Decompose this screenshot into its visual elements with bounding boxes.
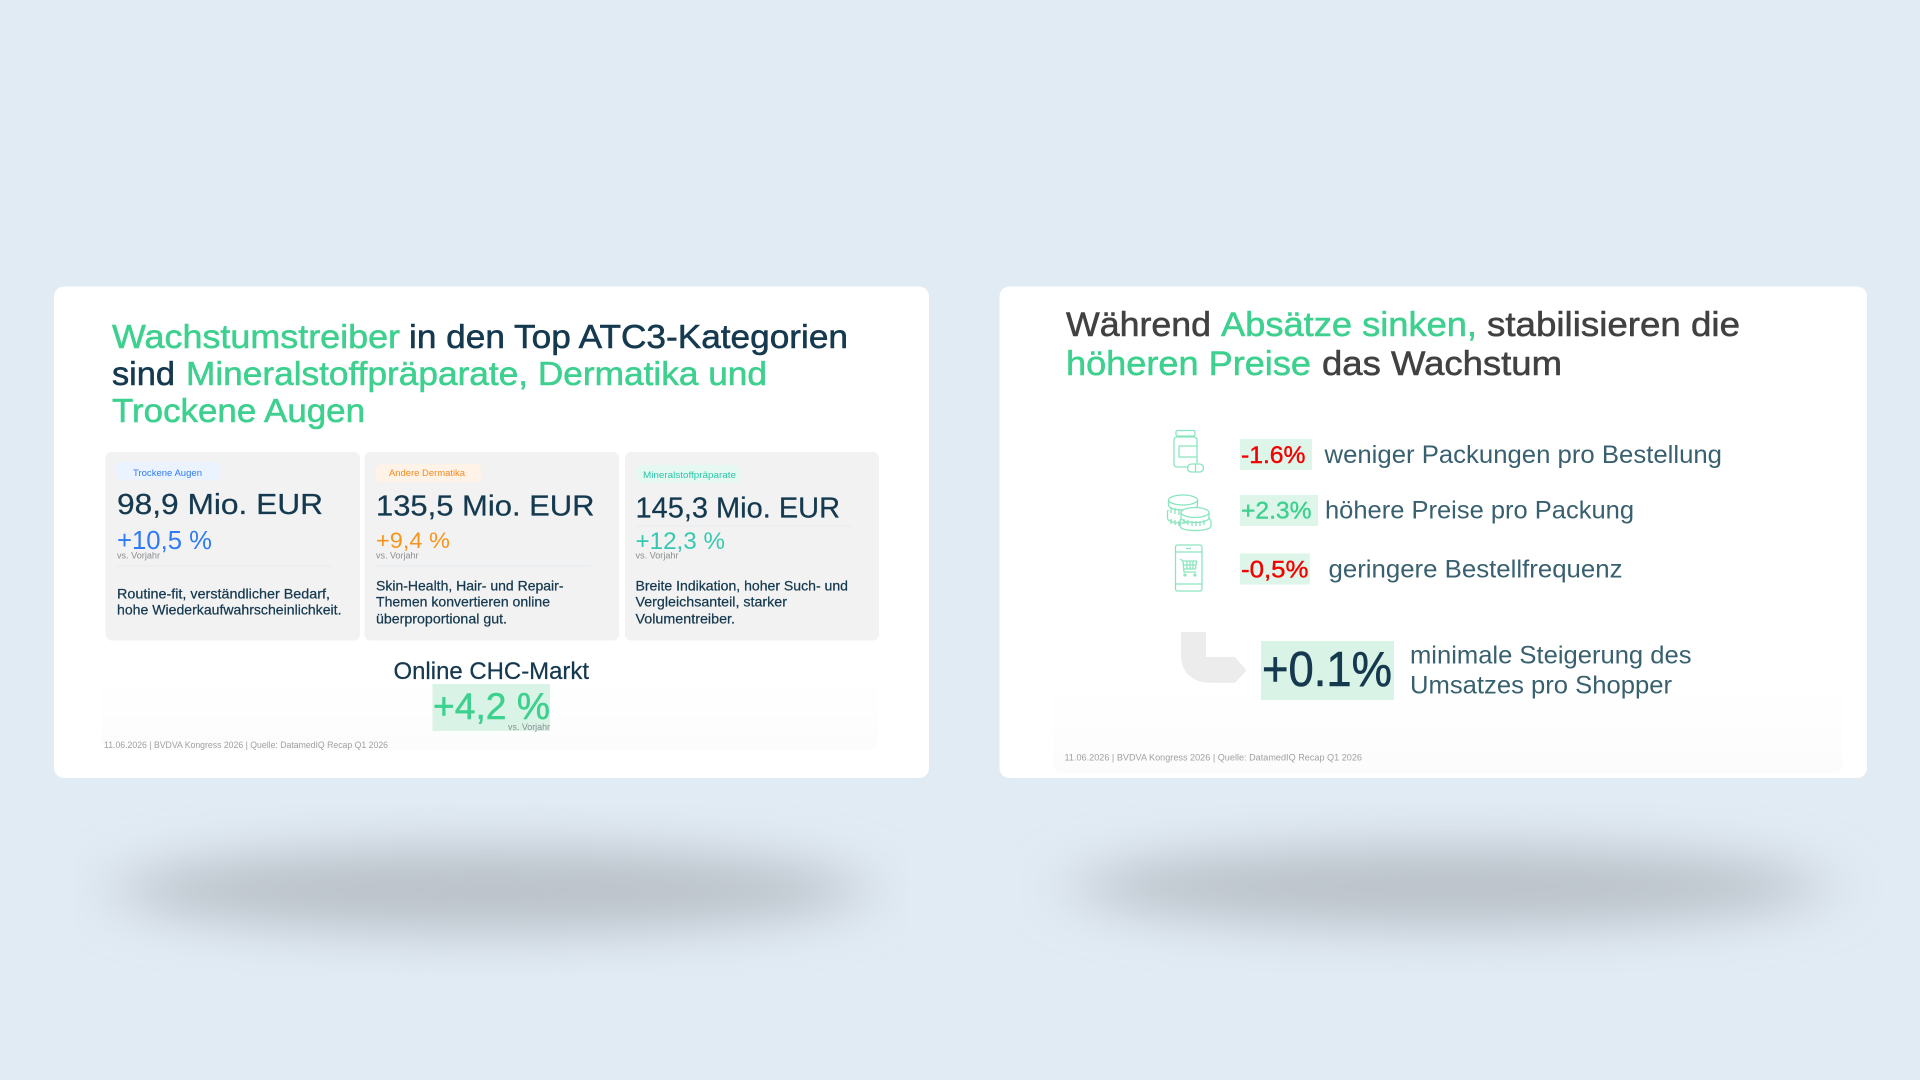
row: Preise pro Packung (1240, 495, 1634, 526)
value: 135,5 Mio. EUR (376, 490, 594, 522)
description: Themen konvertieren online (376, 594, 550, 610)
heading: right title: stabilisieren die (1487, 306, 1740, 344)
market growth callout: vs. Vorjahr (508, 722, 550, 732)
row: Bestellfrequenz (1240, 554, 1622, 584)
panel: Absätze und Preise (1000, 286, 1867, 778)
heading: right title: Absätze sinken, (1221, 306, 1477, 344)
heading: right title: das Wachstum (1322, 345, 1562, 383)
description: Volumentreiber. (636, 610, 735, 626)
growth: +12,3 % (636, 528, 725, 555)
chip: Mineralstoffpräparate (643, 470, 736, 481)
panel: Wachstumstreiber (54, 286, 929, 778)
card: Andere Dermatika (364, 452, 619, 640)
row: Preise pro Packung: höhere Preise pro Packung (1325, 496, 1634, 524)
growth: +10,5 % (117, 525, 212, 555)
row: Bestellfrequenz: -0,5% (1241, 556, 1308, 584)
comparison label: vs. Vorjahr (117, 550, 160, 560)
market heading: Online CHC-Markt (394, 658, 589, 685)
heading: left title: Trockene Augen (112, 393, 365, 430)
row: Packungen pro Bestellung: weniger Packungen pro Bestellung (1323, 441, 1722, 469)
result text: minimale Steigerung des (1410, 642, 1692, 670)
icon: medicine bottle (1174, 430, 1204, 472)
arrow: result (1181, 632, 1247, 683)
description: Breite Indikation, hoher Such- und (636, 578, 848, 594)
description (636, 578, 848, 626)
chip: Trockene Augen (133, 468, 202, 479)
result callout: +0.1% (1262, 643, 1392, 697)
faint footer band (102, 677, 878, 750)
card: Mineralstoffpräparate (625, 452, 879, 640)
chip: Andere Dermatika (389, 468, 466, 479)
shadow: right panel (1074, 845, 1824, 929)
result text (1410, 642, 1692, 700)
icon: phone with shopping cart (1176, 545, 1202, 591)
row: Packungen pro Bestellung: -1.6% (1241, 442, 1306, 469)
value: 145,3 Mio. EUR (636, 492, 840, 524)
row: Preise pro Packung: +2.3% (1241, 498, 1312, 524)
heading: left title (112, 319, 848, 430)
description: hohe Wiederkaufwahrscheinlichkeit. (117, 602, 342, 618)
card: Trockene Augen (106, 452, 360, 640)
heading: right title (1066, 306, 1740, 383)
faint footer band (1053, 683, 1842, 773)
heading: left title: in den Top ATC3-Kategorien (409, 319, 848, 356)
description (117, 586, 342, 618)
market growth callout: +4,2 % (433, 686, 550, 727)
chip (636, 465, 742, 483)
chip (376, 464, 481, 482)
description: Vergleichsanteil, starker (636, 594, 787, 610)
heading: right title: Während (1066, 306, 1211, 344)
description: Skin-Health, Hair- und Repair- (376, 578, 564, 594)
heading: left title: Wachstumstreiber (112, 319, 400, 356)
heading: left title: sind (112, 356, 175, 393)
comparison label: vs. Vorjahr (636, 550, 678, 560)
value: 98,9 Mio. EUR (117, 489, 323, 521)
chip (116, 462, 220, 480)
icon: coin stacks (1168, 495, 1211, 530)
result text: Umsatzes pro Shopper (1410, 672, 1672, 700)
footer: left source: 11.06.2026 | BVDVA Kongress 2026 | Quelle: DatamedIQ Recap Q1 2026 (104, 740, 388, 751)
description (376, 578, 564, 626)
shadow: left panel (116, 846, 866, 934)
comparison label: vs. Vorjahr (376, 550, 418, 560)
heading: right title: höheren Preise (1066, 345, 1311, 383)
description: Routine-fit, verständlicher Bedarf, (117, 586, 330, 602)
heading: left title: Mineralstoffpräparate, Dermatika und (186, 356, 767, 393)
growth: +9,4 % (376, 528, 450, 553)
row: Bestellfrequenz: geringere Bestellfrequenz (1328, 556, 1622, 584)
description: überproportional gut. (376, 610, 507, 626)
footer: right source: 11.06.2026 | BVDVA Kongress 2026 | Quelle: DatamedIQ Recap Q1 2026 (1064, 752, 1362, 764)
